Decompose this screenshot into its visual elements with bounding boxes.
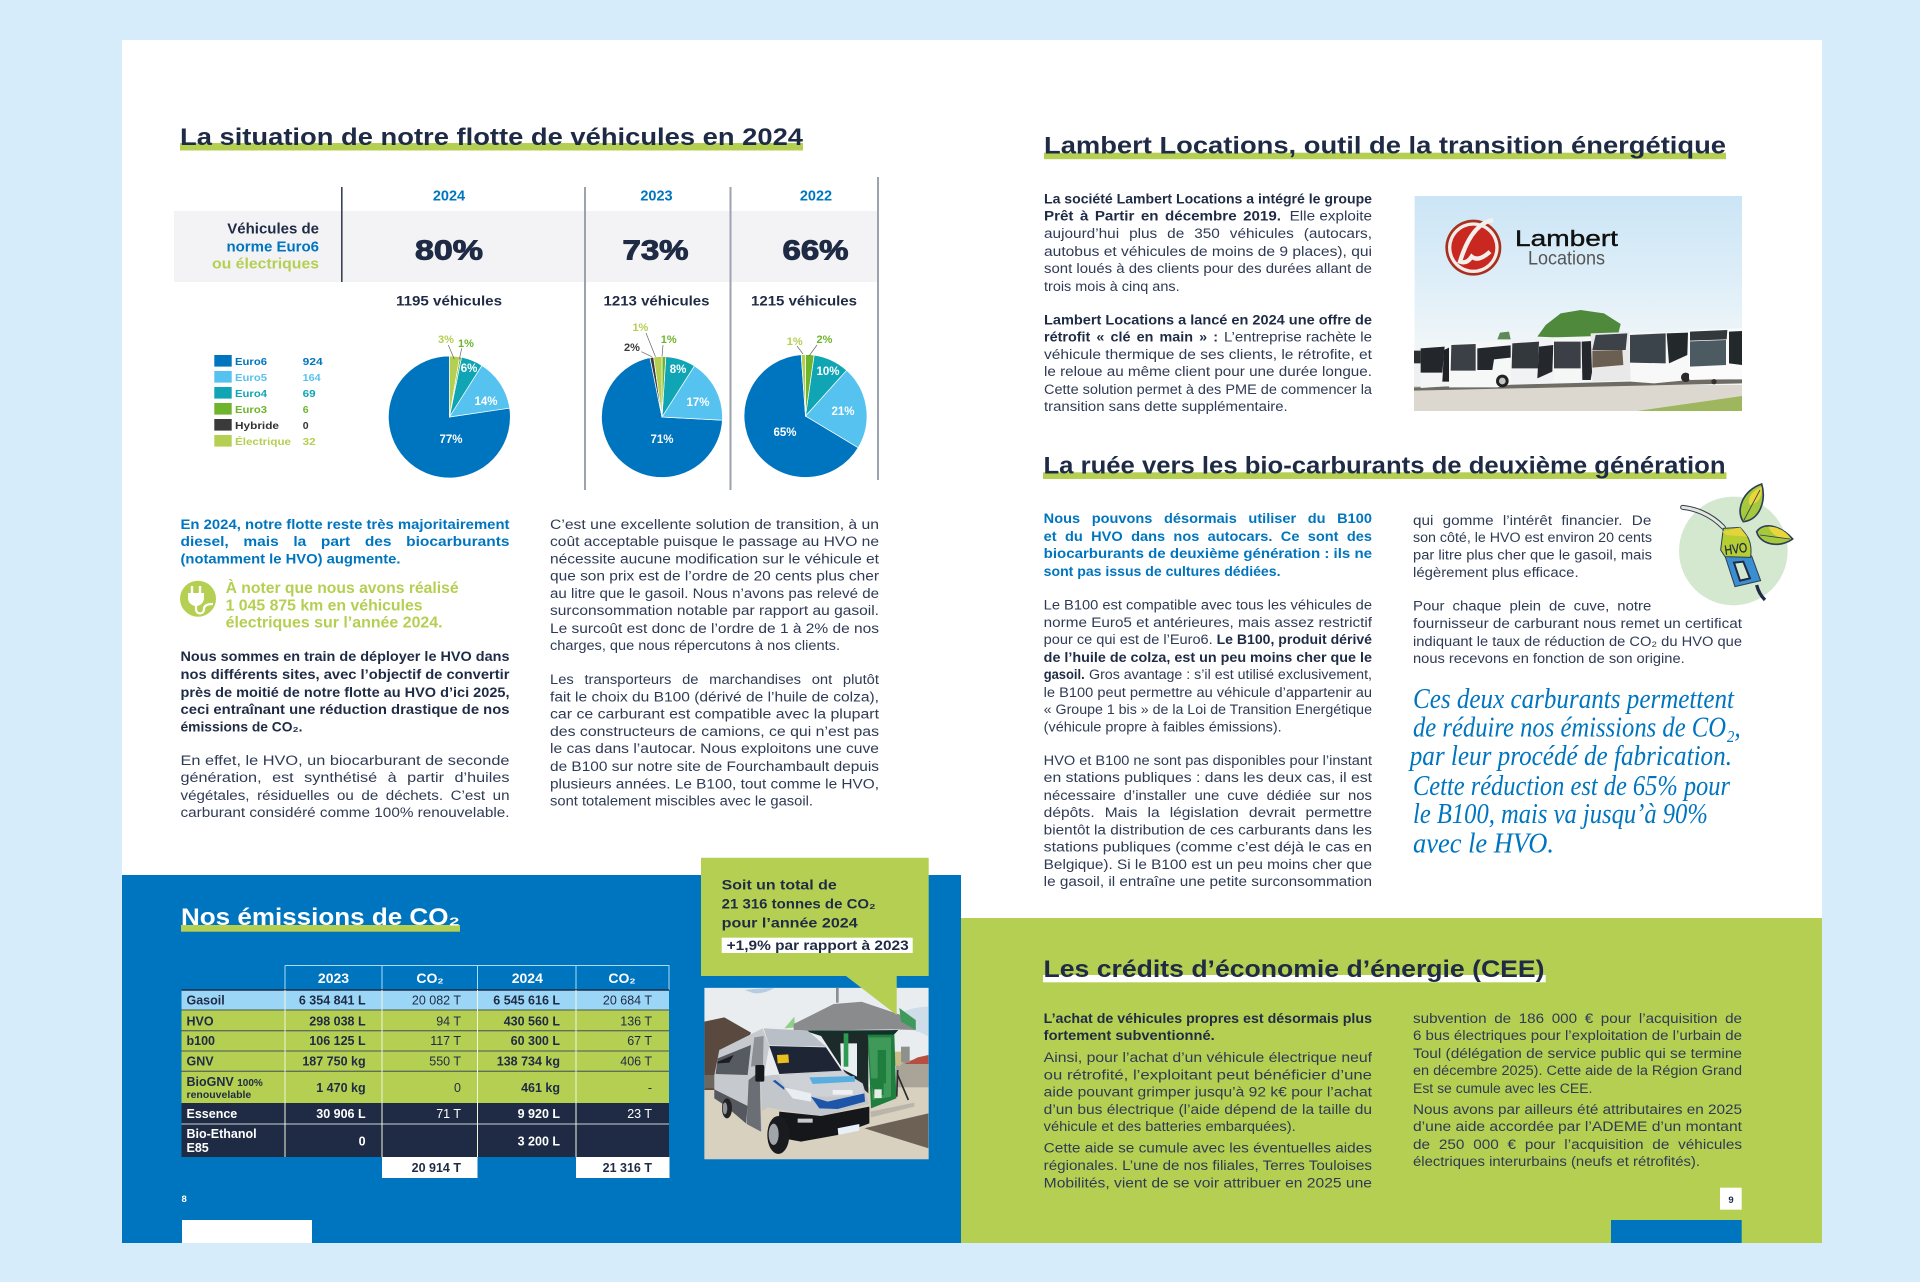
table: Euro6 share by year: 2024 bbox=[433, 188, 465, 204]
text: company: autobus et véhicules de moins de 9 places), qui bbox=[1044, 244, 1372, 259]
pie chart: 2024 bbox=[388, 334, 510, 478]
legend: 924 bbox=[303, 356, 323, 368]
text: B100 for freight: de B100 sur notre site de Fourchambault depuis bbox=[550, 759, 879, 774]
text: retrofit offer bbox=[1044, 312, 1373, 414]
text: retrofit offer: le reloue au même client pour une durée longue. bbox=[1044, 364, 1372, 379]
table: fuel consumption and CO2: 2023 bbox=[318, 970, 349, 986]
callout: total CO2: pour l’année 2024 bbox=[722, 914, 858, 930]
text: fleet intro: (notamment le HVO) augmente. bbox=[180, 552, 400, 566]
text: B100 compatibility: Le B100 est compatible avec tous les véhicules de bbox=[1044, 598, 1372, 612]
text: B100 compatibility: pour ce qui est de l’Euro6. bbox=[1044, 632, 1213, 647]
callout: total CO2: Soit un total de bbox=[722, 876, 837, 892]
table: fuel consumption and CO2: 6 354 841 L bbox=[299, 994, 366, 1008]
text: HVO deployment: Nous sommes en train de déployer le HVO dans bbox=[180, 649, 510, 664]
text: HVO deployment: émissions de CO₂. bbox=[180, 720, 302, 734]
table: fuel consumption and CO2: 67 T bbox=[627, 1034, 652, 1048]
heading: Lambert Locations: Lambert Locations, outil de la transition énergétique bbox=[1044, 132, 1726, 160]
icon: HVO nozzle with leaves bbox=[1679, 484, 1793, 605]
text: retrofit offer: véhicule thermique de ses clients, le rétrofite, et bbox=[1044, 347, 1372, 362]
table: fuel consumption and CO2: renouvelable bbox=[186, 1089, 251, 1101]
callout: electric kilometres bbox=[226, 580, 459, 632]
legend: 164 bbox=[303, 372, 321, 384]
heading: fleet situation: La situation de notre flotte de véhicules en 2024 bbox=[180, 124, 804, 151]
table: fuel consumption and CO2: 21 316 T bbox=[603, 1161, 652, 1175]
text: transition solution: coût acceptable puisque le passage au HVO ne bbox=[550, 534, 879, 549]
table: fuel consumption and CO2: 406 T bbox=[620, 1054, 652, 1068]
text: retrofit offer: Lambert Locations a lancé en 2024 une offre de bbox=[1044, 312, 1373, 328]
text: HVO cost: qui gomme l’intérêt financier. De bbox=[1413, 513, 1651, 528]
text: fleet intro bbox=[180, 517, 510, 566]
pie chart: 2024: 3% bbox=[438, 334, 454, 346]
text: B100 compatibility: norme Euro5 et antérieures, mais assez restrictif bbox=[1044, 615, 1372, 630]
text: company bbox=[1044, 192, 1373, 294]
text: grants: Toul (délégation de service public qui se termine bbox=[1413, 1046, 1742, 1061]
table: fuel consumption and CO2: 23 T bbox=[627, 1107, 652, 1121]
table: fuel consumption and CO2: 30 906 L bbox=[316, 1107, 366, 1121]
legend: Euro3 bbox=[235, 404, 267, 416]
table: fuel consumption and CO2: 71 T bbox=[436, 1107, 461, 1121]
text: subsidies: véhicule et des batteries embarquées). bbox=[1044, 1119, 1296, 1134]
photo: van at gas station bbox=[704, 988, 929, 1159]
table: fuel consumption and CO2: 6 545 616 L bbox=[493, 994, 560, 1008]
text: grants: subvention de 186 000 € pour l’acquisition de bbox=[1413, 1011, 1742, 1026]
table: Euro6 share by year: 1213 véhicules bbox=[604, 292, 710, 308]
table: fuel consumption and CO2: CO₂ bbox=[416, 970, 444, 986]
table: fuel consumption and CO2: 20 082 T bbox=[412, 994, 461, 1008]
table: Euro6 share by year: 66% bbox=[782, 234, 849, 266]
text: transition solution: Le surcoût est donc de l’ordre de 1 à 2% de nos bbox=[550, 621, 879, 636]
table: fuel consumption and CO2: E85 bbox=[186, 1141, 209, 1155]
panel: energy saving credits bbox=[961, 918, 1822, 1243]
text: subsidies: Mobilités, vient de se voir attribuer en 2025 une bbox=[1044, 1176, 1372, 1190]
text: transition solution: C’est une excellente solution de transition, à un bbox=[550, 517, 879, 532]
pie chart: 2022: 10% bbox=[816, 366, 840, 378]
pie chart: 2024: 14% bbox=[474, 396, 498, 408]
text: certificate: Pour chaque plein de cuve, notre bbox=[1413, 598, 1651, 614]
text: certificate bbox=[1413, 598, 1742, 666]
text: subsidies bbox=[1044, 1011, 1372, 1190]
table: Euro6 share by year: 80% bbox=[415, 234, 483, 266]
table: fuel consumption and CO2: 136 T bbox=[620, 1014, 652, 1028]
panel: Lambert Locations bbox=[1044, 132, 1742, 414]
page number 8: 8 bbox=[182, 1194, 187, 1205]
text: biofuels intro: Nous pouvons désormais utiliser du B100 bbox=[1044, 511, 1372, 526]
text: public stations: en stations publiques : dans les deux cas, il est bbox=[1044, 770, 1372, 785]
table: fuel consumption and CO2: 1 470 kg bbox=[316, 1081, 366, 1095]
table: Euro6 share by year: 2023 bbox=[640, 188, 673, 204]
pie chart: 2023: 1% bbox=[632, 322, 649, 334]
text: certificate: indiquant le taux de réduction de CO₂ du HVO que bbox=[1413, 634, 1742, 649]
pull quote: CO2 reduction: le B100, mais va jusqu’à 90% bbox=[1413, 798, 1708, 830]
text: HVO definition: En effet, le HVO, un biocarburant de seconde bbox=[180, 753, 510, 768]
text: company: trois mois à cinq ans. bbox=[1044, 279, 1180, 294]
table: Euro6 share by year: 73% bbox=[622, 234, 689, 266]
text: transition solution: surconsommation notable par rapport au gasoil. bbox=[550, 603, 879, 618]
table: fuel consumption and CO2: 94 T bbox=[436, 1014, 461, 1028]
text: B100 compatibility: Le B100, produit dérivé bbox=[1217, 632, 1373, 647]
legend: Hybride bbox=[235, 420, 279, 432]
panel: fleet situation bbox=[174, 124, 880, 820]
pull quote: CO2 reduction bbox=[1408, 683, 1741, 860]
text: B100 compatibility: le B100 peut permettre au véhicule d’appartenir au bbox=[1044, 685, 1372, 700]
pie chart: 2022 bbox=[744, 334, 867, 477]
text: grants: Est se cumule avec les CEE. bbox=[1413, 1081, 1592, 1096]
tab: white bbox=[182, 1220, 312, 1243]
table: Euro6 share by year: 2022 bbox=[800, 188, 832, 204]
legend: Euro4 bbox=[235, 388, 267, 400]
text: retrofit offer: rétrofit « clé en main » : bbox=[1044, 330, 1218, 344]
callout: total CO2 bbox=[701, 858, 929, 1015]
text: subsidies: L’achat de véhicules propres est désormais plus bbox=[1044, 1011, 1372, 1026]
legend: 32 bbox=[303, 436, 316, 448]
text: public stations: Belgique). Si le B100 est un peu moins cher que bbox=[1044, 857, 1372, 872]
pie chart: 2022: 65% bbox=[773, 427, 797, 439]
text: grants: de 250 000 € pour l’acquisition de véhicules bbox=[1413, 1137, 1742, 1152]
pie chart: 2023 bbox=[601, 322, 722, 478]
text: HVO cost: son côté, le HVO est environ 20 cents bbox=[1413, 530, 1652, 545]
table: fuel consumption and CO2: 187 750 kg bbox=[302, 1054, 366, 1068]
text: HVO deployment bbox=[180, 649, 510, 734]
panel: CO2 emissions bbox=[122, 858, 961, 1243]
pull quote: CO2 reduction: Cette réduction est de 65% pour bbox=[1413, 770, 1731, 802]
text: subsidies: ou rétrofité, l’exploitant peut bénéficier d’une bbox=[1044, 1068, 1372, 1082]
pie chart: 2023: 17% bbox=[686, 397, 710, 409]
text: fleet intro: En 2024, notre flotte reste très majoritairement bbox=[180, 517, 510, 532]
table: fuel consumption and CO2: Gasoil bbox=[186, 994, 225, 1008]
table: fuel consumption and CO2: 20 914 T bbox=[412, 1161, 461, 1175]
text: B100 compatibility: (véhicule propre à faibles émissions). bbox=[1044, 720, 1282, 734]
photo: Lambert bus fleet bbox=[1414, 196, 1742, 411]
text: grants: Nous avons par ailleurs été attributaires en 2025 bbox=[1413, 1102, 1742, 1117]
table: fuel consumption and CO2: BioGNV 100% bbox=[186, 1075, 263, 1089]
tab: blue bbox=[1611, 1220, 1742, 1243]
icon: HVO nozzle with leaves: HVO bbox=[1724, 540, 1748, 558]
text: B100 for freight: fait le choix du B100 (dérivé de l’huile de colza), bbox=[550, 690, 879, 704]
text: transition solution: au litre que le gasoil. Nous n’avons pas relevé de bbox=[550, 586, 879, 601]
text: B100 compatibility: Gros avantage : s’il est utilisé exclusivement, bbox=[1089, 667, 1372, 682]
text: B100 for freight: des constructeurs de camions, ce qui n’est pas bbox=[550, 724, 879, 739]
pull quote: CO2 reduction: avec le HVO. bbox=[1413, 828, 1554, 860]
text: HVO cost bbox=[1413, 513, 1652, 580]
text: public stations: stations publiques (comme c’est déjà le cas en bbox=[1044, 840, 1372, 854]
legend: Euro5 bbox=[235, 372, 267, 384]
table: fuel consumption and CO2: 550 T bbox=[429, 1054, 461, 1068]
text: B100 for freight bbox=[550, 672, 879, 808]
text: biofuels intro bbox=[1044, 511, 1373, 579]
text: B100 for freight: le cas dans l’autocar. Nous exploitons une cuve bbox=[550, 741, 879, 756]
text: subsidies: fortement subventionné. bbox=[1044, 1028, 1215, 1043]
table: fuel consumption and CO2: - bbox=[648, 1081, 652, 1095]
text: public stations: nécessaire d’installer une cuve dédiée sur nos bbox=[1044, 788, 1372, 803]
pie chart: 2024: 77% bbox=[439, 434, 463, 446]
text: HVO definition: végétales, résiduelles ou de déchets. C’est un bbox=[180, 788, 510, 803]
text: B100 for freight: plusieurs années. Le B100, tout comme le HVO, bbox=[550, 776, 879, 792]
icon: Lambert logo: Lambert bbox=[1515, 226, 1618, 251]
panel: second-generation biofuels bbox=[1043, 452, 1793, 889]
text: retrofit offer: L’entreprise rachète le bbox=[1224, 330, 1372, 344]
text: HVO cost: par litre plus cher que le gasoil, mais bbox=[1413, 548, 1652, 562]
table: Euro6 share by year: norme Euro6 bbox=[226, 238, 319, 256]
icon: electric plug bbox=[180, 581, 216, 617]
legend: 69 bbox=[303, 388, 316, 400]
table: fuel consumption and CO2: 117 T bbox=[430, 1034, 461, 1048]
table: Euro6 share by year: 1215 véhicules bbox=[751, 292, 857, 308]
pie chart: 2022: 1% bbox=[787, 336, 803, 348]
text: B100 compatibility: gasoil. bbox=[1044, 667, 1085, 682]
table: fuel consumption and CO2: b100 bbox=[186, 1034, 215, 1048]
text: retrofit offer: transition sans dette supplémentaire. bbox=[1044, 399, 1288, 414]
pie chart: 2024: 6% bbox=[461, 363, 477, 375]
pie chart: 2024: 1% bbox=[458, 338, 474, 350]
text: company: Prêt à Partir en décembre 2019. bbox=[1044, 208, 1281, 224]
text: grants: d’une aide accordée par l’ADEME d’un montant bbox=[1413, 1119, 1742, 1134]
table: fuel consumption and CO2: 430 560 L bbox=[504, 1014, 560, 1028]
text: HVO definition: génération, est synthétisé à partir d’huiles bbox=[180, 770, 510, 785]
callout: electric kilometres: 1 045 875 km en véhicules bbox=[226, 598, 423, 614]
table: fuel consumption and CO2: 9 920 L bbox=[518, 1107, 560, 1121]
table: Euro6 share by year: 1195 véhicules bbox=[396, 292, 502, 308]
pie chart: 2023: 71% bbox=[650, 434, 674, 446]
text: B100 compatibility: de l’huile de colza, est un peu moins cher que le bbox=[1044, 650, 1373, 665]
legend: 0 bbox=[303, 420, 309, 432]
table: fuel consumption and CO2: 138 734 kg bbox=[497, 1054, 560, 1068]
text: HVO definition bbox=[180, 753, 510, 820]
table: fuel consumption and CO2: 106 125 L bbox=[309, 1034, 366, 1048]
pie chart: 2023: 1% bbox=[661, 334, 677, 346]
text: subsidies: d’un bus électrique (l’aide dépend de la taille du bbox=[1044, 1102, 1372, 1117]
table: fuel consumption and CO2 bbox=[182, 966, 670, 1178]
text: transition solution: que son prix est de l’ordre de 20 cents plus cher bbox=[550, 568, 880, 584]
callout: electric kilometres: électriques sur l’année 2024. bbox=[226, 614, 443, 632]
text: grants: en décembre 2025). Cette aide de la Région Grand bbox=[1413, 1063, 1742, 1078]
pie chart: 2023: 2% bbox=[624, 342, 640, 354]
table: fuel consumption and CO2: 0 bbox=[454, 1081, 461, 1095]
text: biofuels intro: sont pas issus de cultures dédiées. bbox=[1044, 564, 1280, 579]
callout: total CO2: 21 316 tonnes de CO₂ bbox=[722, 895, 876, 911]
text: company: La société Lambert Locations a intégré le groupe bbox=[1044, 192, 1373, 206]
pie chart: 2023: 8% bbox=[670, 364, 686, 376]
text: subsidies: aide pouvant grimper jusqu’à 92 k€ pour l’achat bbox=[1044, 1084, 1372, 1100]
page number 9 bbox=[1720, 1188, 1742, 1210]
legend: Euro6 bbox=[235, 356, 267, 368]
text: HVO deployment: nos différents sites, avec l’objectif de convertir bbox=[180, 667, 510, 682]
icon: Lambert logo bbox=[1445, 220, 1618, 276]
heading: CO2 emissions: Nos émissions de CO₂ bbox=[181, 904, 460, 931]
text: B100 compatibility: « Groupe 1 bis » de la Loi de Transition Energétique bbox=[1044, 702, 1372, 717]
text: transition solution: charges, que nous répercutons à nos clients. bbox=[550, 638, 840, 653]
text: grants: électriques interurbains (neufs et rétrofités). bbox=[1413, 1154, 1700, 1169]
table: fuel consumption and CO2: 461 kg bbox=[521, 1081, 560, 1095]
text: public stations: dépôts. Mais la législation devrait permettre bbox=[1044, 805, 1372, 820]
pie chart: 2022: 2% bbox=[817, 334, 833, 346]
text: grants: 6 bus électriques pour l’exploitation de l’urbain de bbox=[1413, 1028, 1742, 1043]
text: certificate: nous recevons en fonction de son origine. bbox=[1413, 651, 1685, 666]
text: B100 for freight: car ce carburant est compatible avec la plupart bbox=[550, 706, 879, 722]
text: subsidies: régionales. L’une de nos filiales, Terres Touloises bbox=[1044, 1158, 1372, 1173]
text: public stations: bientôt la distribution de ces carburants dans les bbox=[1044, 822, 1372, 838]
text: public stations: HVO et B100 ne sont pas disponibles pour l’instant bbox=[1044, 753, 1372, 768]
legend bbox=[214, 355, 323, 448]
table: fuel consumption and CO2: CO₂ bbox=[608, 970, 636, 986]
table: fuel consumption and CO2: 60 300 L bbox=[511, 1034, 560, 1048]
table: fuel consumption and CO2: 3 200 L bbox=[518, 1134, 560, 1148]
text: biofuels intro: et du HVO dans nos autocars. Ce sont des bbox=[1044, 529, 1372, 544]
table: Euro6 share by year bbox=[174, 177, 879, 490]
callout: electric kilometres: À noter que nous avons réalisé bbox=[226, 580, 459, 597]
text: company: sont loués à des clients pour des durées allant de bbox=[1044, 261, 1372, 276]
table: fuel consumption and CO2: HVO bbox=[186, 1014, 214, 1028]
table: fuel consumption and CO2: 298 038 L bbox=[309, 1014, 366, 1028]
pull quote: CO2 reduction: Ces deux carburants permettent bbox=[1413, 683, 1735, 715]
table: fuel consumption and CO2: Bio-Ethanol bbox=[186, 1127, 257, 1141]
legend: 6 bbox=[303, 404, 309, 416]
text: certificate: fournisseur de carburant nous remet un certificat bbox=[1413, 616, 1742, 631]
text: B100 compatibility bbox=[1044, 598, 1373, 734]
table: fuel consumption and CO2: 2024 bbox=[512, 970, 543, 986]
pie chart: 2022: 21% bbox=[831, 406, 855, 418]
text: public stations: le gasoil, il entraîne une petite surconsommation bbox=[1044, 874, 1372, 889]
text: biofuels intro: biocarburants de deuxième génération : ils ne bbox=[1044, 546, 1373, 561]
callout: total CO2: +1,9% par rapport à 2023 bbox=[727, 937, 909, 953]
table: fuel consumption and CO2: 0 bbox=[359, 1134, 366, 1148]
text: HVO deployment: ceci entraînant une réduction drastique de nos bbox=[180, 702, 510, 717]
table: fuel consumption and CO2: GNV bbox=[186, 1054, 214, 1068]
text: subsidies: Cette aide se cumule avec les éventuelles aides bbox=[1044, 1140, 1372, 1156]
text: B100 for freight: Les transporteurs de marchandises ont plutôt bbox=[550, 672, 879, 687]
heading: CEE: Les crédits d’économie d’énergie (CEE) bbox=[1044, 956, 1544, 983]
pull quote: CO2 reduction: par leur procédé de fabrication. bbox=[1408, 740, 1732, 772]
text: HVO cost: légèrement plus efficace. bbox=[1413, 565, 1579, 580]
text: company: Elle exploite bbox=[1290, 208, 1372, 224]
page number 9: 9 bbox=[1728, 1195, 1734, 1206]
text: grants bbox=[1413, 1011, 1742, 1169]
text: company: aujourd’hui plus de 350 véhicules (autocars, bbox=[1044, 226, 1372, 241]
text: public stations bbox=[1044, 753, 1372, 889]
text: transition solution bbox=[550, 517, 880, 653]
text: retrofit offer: Cette solution permet à des PME de commencer la bbox=[1044, 382, 1373, 397]
text: fleet intro: diesel, mais la part des biocarburants bbox=[180, 534, 510, 549]
text: B100 for freight: sont totalement miscibles avec le gasoil. bbox=[550, 794, 813, 808]
table: Euro6 share by year: ou électriques bbox=[212, 256, 319, 272]
pull quote: CO2 reduction: de réduire nos émissions de CO₂, bbox=[1413, 712, 1741, 744]
text: subsidies: Ainsi, pour l’achat d’un véhicule électrique neuf bbox=[1044, 1050, 1372, 1065]
legend: Électrique bbox=[235, 435, 291, 448]
text: HVO deployment: près de moitié de notre flotte au HVO d’ici 2025, bbox=[180, 685, 510, 700]
text: transition solution: nécessite aucune modification sur le véhicule et bbox=[550, 552, 879, 566]
table: fuel consumption and CO2: 20 684 T bbox=[603, 994, 652, 1008]
table: Euro6 share by year: Véhicules de bbox=[227, 220, 319, 238]
icon: Lambert logo: Locations bbox=[1528, 248, 1605, 269]
heading: biofuels: La ruée vers les bio-carburants de deuxième génération bbox=[1044, 452, 1726, 480]
table: fuel consumption and CO2: Essence bbox=[186, 1107, 237, 1121]
text: HVO definition: carburant considéré comme 100% renouvelable. bbox=[180, 805, 510, 820]
